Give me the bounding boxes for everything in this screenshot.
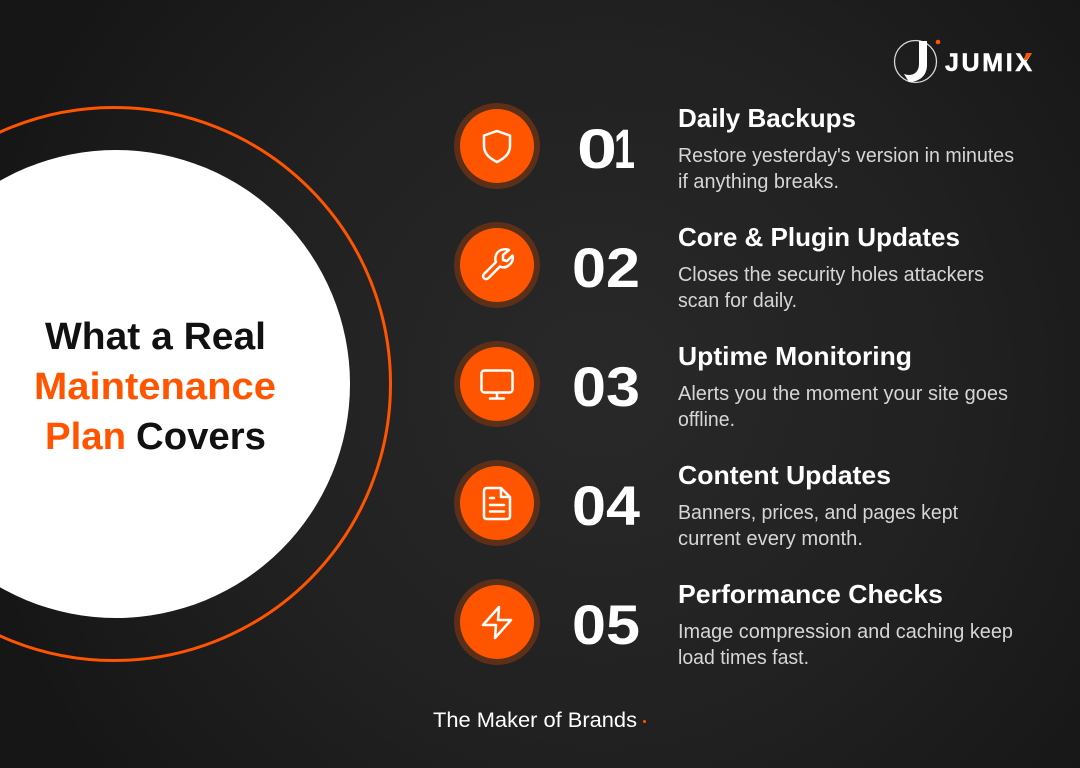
logo mark bbox=[894, 40, 940, 82]
icon: monitor bbox=[454, 341, 540, 427]
number 01 bbox=[577, 117, 635, 180]
item 03 bbox=[454, 341, 1008, 431]
heading: Performance Checks bbox=[678, 579, 943, 609]
heading: Daily Backups bbox=[678, 103, 856, 133]
heading: Content Updates bbox=[678, 460, 891, 490]
icon: wrench bbox=[454, 222, 540, 308]
description bbox=[678, 145, 1014, 193]
description: offline. bbox=[678, 409, 735, 431]
title: Covers bbox=[136, 416, 266, 458]
title: What a Real bbox=[45, 316, 266, 358]
heading: Uptime Monitoring bbox=[678, 341, 912, 371]
description bbox=[678, 383, 1008, 431]
item 02 bbox=[454, 222, 984, 312]
number 01: 0 bbox=[577, 117, 617, 180]
description: scan for daily. bbox=[678, 290, 797, 312]
description: Banners, prices, and pages kept bbox=[678, 502, 958, 524]
footer tagline: The Maker of Brands bbox=[433, 709, 637, 732]
heading: Core & Plugin Updates bbox=[678, 222, 960, 252]
orange outer ring bbox=[0, 108, 390, 660]
number 03: 03 bbox=[572, 355, 640, 418]
description: Restore yesterday's version in minutes bbox=[678, 145, 1014, 167]
title: Plan bbox=[45, 416, 126, 458]
number 05: 05 bbox=[572, 593, 640, 656]
item 04 bbox=[454, 460, 958, 550]
description: Image compression and caching keep bbox=[678, 621, 1013, 643]
title: Maintenance bbox=[34, 366, 276, 408]
description: load times fast. bbox=[678, 647, 809, 669]
description bbox=[678, 621, 1013, 669]
icon: lightning bolt bbox=[454, 579, 540, 665]
white circle bbox=[0, 150, 350, 618]
description bbox=[678, 264, 984, 312]
icon: document bbox=[454, 460, 540, 546]
item 01 bbox=[454, 103, 1014, 193]
title bbox=[34, 316, 276, 458]
logo: JUMIX bbox=[894, 40, 1032, 82]
description: Alerts you the moment your site goes bbox=[678, 383, 1008, 405]
number 01: 1 bbox=[614, 117, 635, 180]
description bbox=[678, 502, 958, 550]
number 02: 02 bbox=[572, 236, 640, 299]
description: Closes the security holes attackers bbox=[678, 264, 984, 286]
icon: shield bbox=[454, 103, 540, 189]
panel: left circle with title bbox=[0, 108, 390, 660]
number 04: 04 bbox=[572, 474, 640, 537]
description: current every month. bbox=[678, 528, 863, 550]
description: if anything breaks. bbox=[678, 171, 839, 193]
logo wordmark: JUMIX bbox=[945, 49, 1032, 77]
item 05 bbox=[454, 579, 1013, 669]
